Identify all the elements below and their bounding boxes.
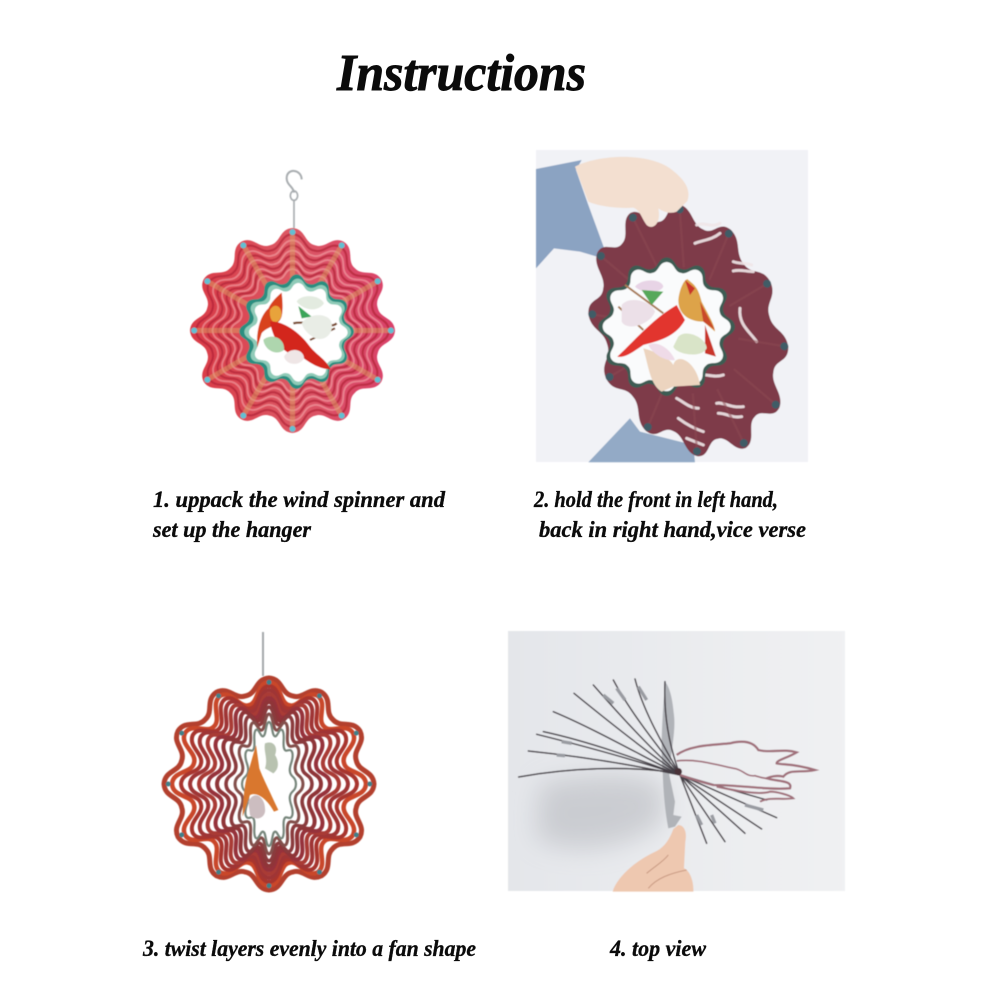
hand <box>575 157 688 227</box>
caption: step 2 <box>533 487 806 543</box>
spinner rings <box>164 678 374 890</box>
panel: step 2 photo of hands holding spinner <box>536 150 808 473</box>
centre hole <box>598 257 735 396</box>
panel: step 4 top view photo <box>508 631 845 892</box>
spinner body <box>190 228 395 433</box>
panel: step 3 spinner twisted into fan <box>164 632 374 890</box>
grey left blades <box>662 682 682 828</box>
photo background <box>536 150 808 462</box>
spinner pale slits <box>677 223 757 445</box>
title: Instructions <box>336 45 586 102</box>
wall shadow <box>537 775 663 848</box>
spinner maroon body <box>579 188 797 473</box>
spinner hub <box>675 768 682 775</box>
caption: step 1: 1. uppack the wind spinner and <box>153 487 446 513</box>
cardinal in centre <box>243 742 278 818</box>
icon: hanger hook <box>287 171 302 228</box>
caption: step 3: 3. twist layers evenly into a fan shape <box>142 936 476 962</box>
hand <box>613 825 693 892</box>
photo background <box>508 631 845 891</box>
caption: step 1 <box>152 487 446 543</box>
spinner centre hole with birds <box>239 274 354 389</box>
caption: step 2: 2. hold the front in left hand, <box>533 487 778 513</box>
panel: step 1 wind spinner with hanger <box>190 171 395 433</box>
right loop outline <box>677 742 815 802</box>
upper sleeve <box>536 160 607 268</box>
hanger <box>262 632 264 676</box>
caption: step 1: set up the hanger <box>152 517 312 543</box>
cardinals and blossom <box>618 285 663 330</box>
caption: step 2: back in right hand,vice verse <box>539 517 806 543</box>
caption: step 4: 4. top view <box>609 936 706 962</box>
fan spokes <box>519 679 777 843</box>
fingers in hole <box>643 348 700 392</box>
lower sleeve <box>588 418 695 462</box>
blade serrations <box>557 687 763 825</box>
